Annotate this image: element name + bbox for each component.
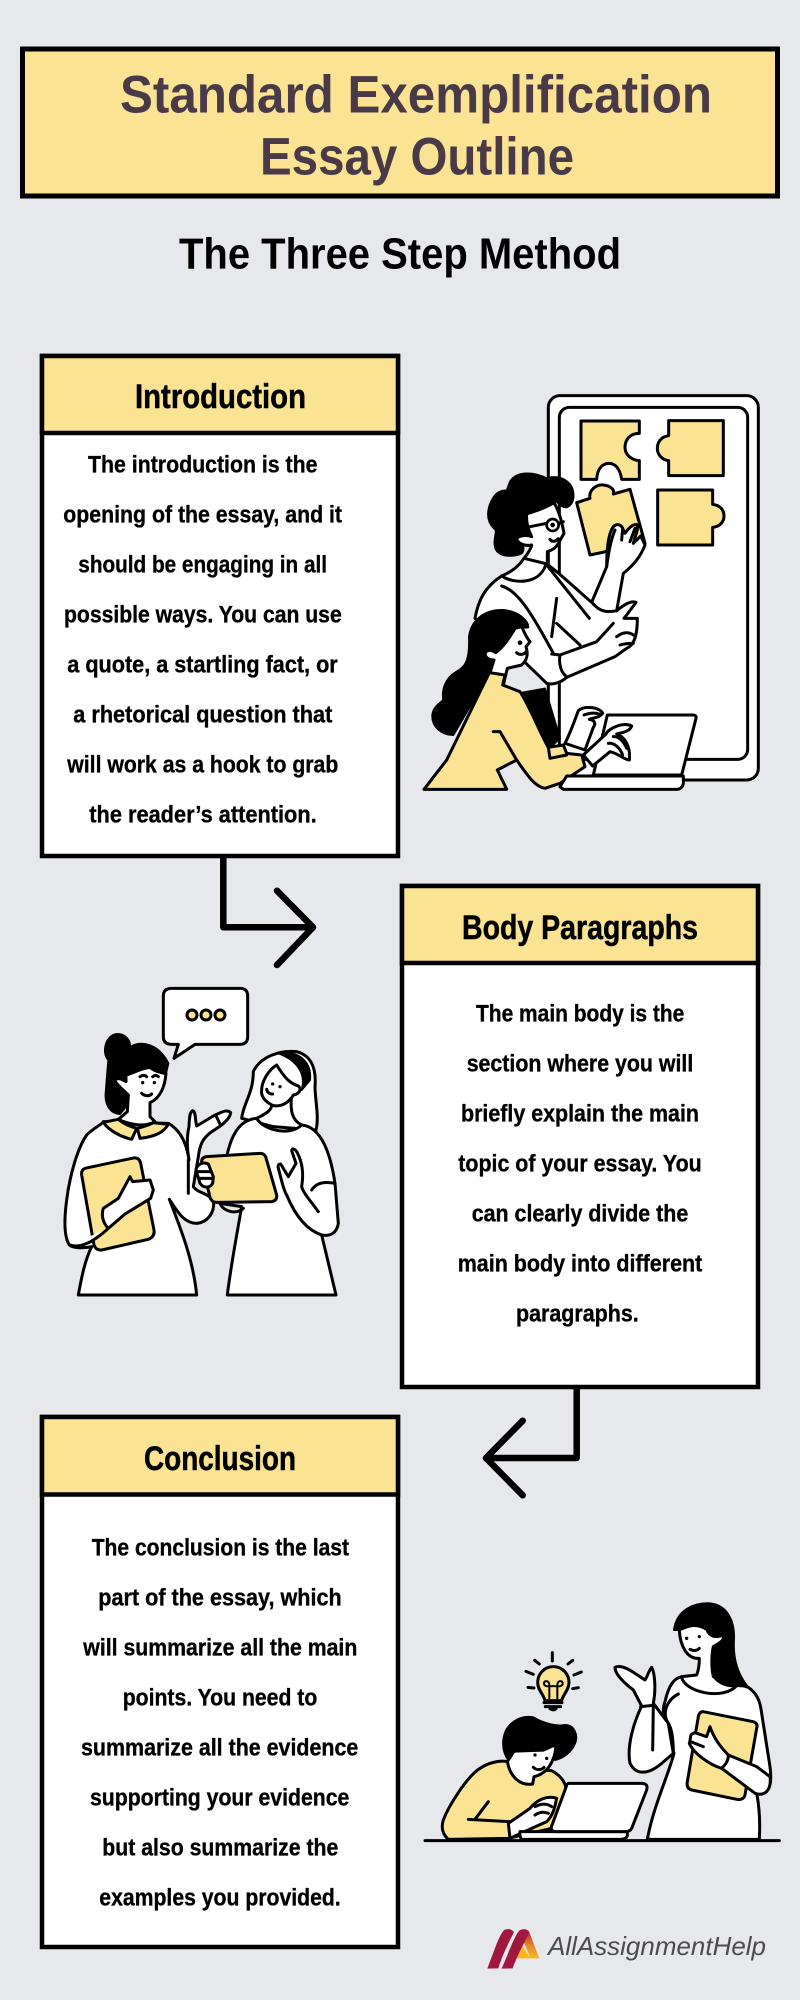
tablet held between women xyxy=(196,1153,277,1202)
introduction text: possible ways. You can use xyxy=(64,602,342,628)
arm holding folder xyxy=(70,1177,153,1246)
conclusion text: summarize all the evidence xyxy=(81,1735,358,1762)
logo mark xyxy=(487,1929,539,1969)
held folder xyxy=(82,1158,154,1250)
introduction text: will work as a hook to grab xyxy=(66,751,338,778)
body paragraphs heading bar xyxy=(402,886,758,963)
typing hand xyxy=(508,1797,557,1838)
introduction text: a rhetorical question that xyxy=(73,701,332,728)
teacher xyxy=(615,1603,771,1839)
speech bubble xyxy=(163,988,248,1058)
lightbulb xyxy=(526,1653,581,1710)
logo: AllAssignmentHelp xyxy=(487,1929,766,1969)
conclusion text: will summarize all the main xyxy=(82,1635,357,1662)
person with glasses xyxy=(475,473,645,748)
body paragraphs text: can clearly divide the xyxy=(472,1201,688,1228)
introduction text: opening of the essay, and it xyxy=(63,502,342,529)
panel: conclusion xyxy=(42,1417,398,1947)
body paragraphs text xyxy=(458,1001,702,1328)
arrow: introduction to body xyxy=(223,858,313,965)
panel: introduction xyxy=(42,356,398,856)
logo: AllAssignmentHelp: AllAssignmentHelp xyxy=(546,1931,766,1961)
conclusion text: points. You need to xyxy=(123,1685,317,1712)
body paragraphs text: topic of your essay. You xyxy=(458,1151,702,1178)
illustration: two people solving puzzle board xyxy=(424,396,758,789)
woman on right xyxy=(220,1051,338,1295)
student xyxy=(442,1717,576,1839)
illustration: two women talking xyxy=(65,988,338,1295)
conclusion text xyxy=(81,1535,358,1912)
introduction text: the reader’s attention. xyxy=(89,801,317,828)
body paragraphs heading bar: Body Paragraphs xyxy=(462,909,698,947)
panel: body paragraphs xyxy=(402,886,758,1387)
arrow: body to conclusion xyxy=(486,1388,577,1495)
laptop xyxy=(560,715,696,789)
introduction text: a quote, a startling fact, or xyxy=(67,651,338,678)
conclusion text: The conclusion is the last xyxy=(92,1535,349,1562)
introduction text xyxy=(63,452,342,828)
raised arm xyxy=(615,1667,673,1772)
body paragraphs text: briefly explain the main xyxy=(461,1101,699,1128)
seated woman in yellow sweater xyxy=(424,610,585,789)
conclusion text: part of the essay, which xyxy=(98,1585,342,1612)
folder xyxy=(687,1712,757,1800)
introduction heading bar xyxy=(42,356,398,433)
body paragraphs text: The main body is the xyxy=(476,1001,684,1028)
body paragraphs text: section where you will xyxy=(467,1051,693,1078)
subtitle: The Three Step Method xyxy=(179,229,621,278)
body paragraphs text: main body into different xyxy=(458,1251,702,1278)
student laptop xyxy=(520,1783,647,1839)
conclusion text: but also summarize the xyxy=(102,1835,338,1862)
introduction text: should be engaging in all xyxy=(78,552,327,579)
puzzle pieces xyxy=(577,421,724,555)
conclusion heading bar xyxy=(42,1417,398,1494)
body paragraphs text: paragraphs. xyxy=(516,1301,639,1328)
conclusion text: supporting your evidence xyxy=(90,1785,349,1812)
title banner: Standard Exemplification xyxy=(120,66,712,125)
title banner: Essay Outline xyxy=(260,127,574,186)
illustration: student at laptop and teacher xyxy=(425,1603,779,1841)
conclusion text: examples you provided. xyxy=(99,1885,341,1912)
conclusion heading bar: Conclusion xyxy=(144,1440,296,1478)
holding hand xyxy=(689,1727,770,1794)
typing hands xyxy=(565,707,632,766)
title banner xyxy=(22,49,778,196)
floor line xyxy=(425,1836,779,1845)
woman on left xyxy=(65,1034,231,1295)
introduction heading bar: Introduction xyxy=(135,378,306,416)
introduction text: The introduction is the xyxy=(88,452,318,479)
